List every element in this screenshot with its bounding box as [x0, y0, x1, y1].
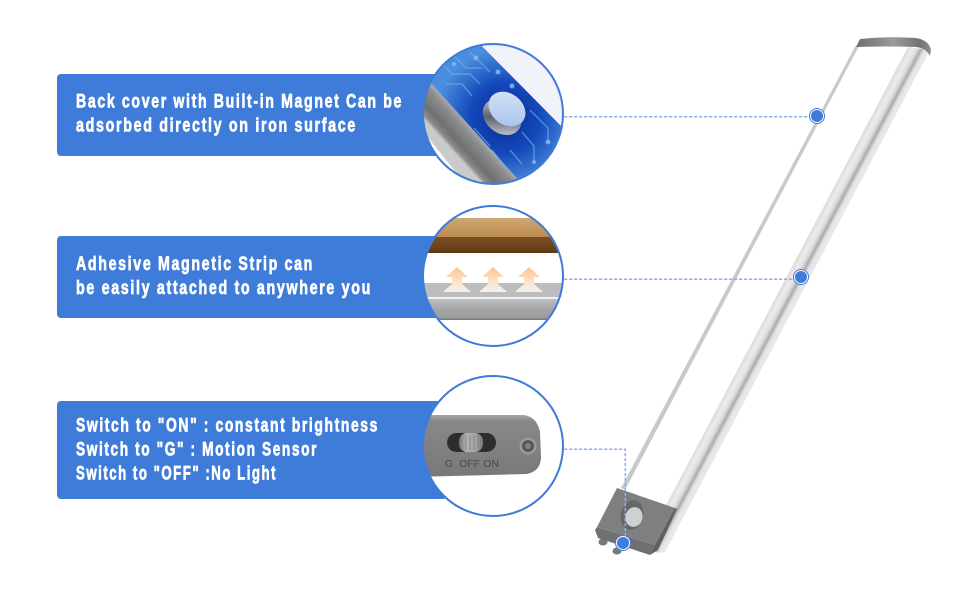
text: magnet description: adsorbed directly on iron surface	[76, 116, 357, 136]
callout circle: magnet close-up	[424, 43, 564, 185]
text: magnet description: Back cover with Built-in Magnet Can be	[76, 92, 403, 112]
connector: switch callout to bar	[564, 449, 630, 550]
top end cap	[856, 37, 931, 56]
panel: magnet back cover	[57, 74, 447, 156]
text: adhesive description: Adhesive Magnetic Strip can	[76, 254, 314, 275]
text: switch modes description: Switch to "ON" : constant brightness	[76, 416, 379, 436]
marker dot	[616, 536, 630, 550]
text: switch modes description	[76, 416, 379, 484]
callout circle: adhesive strip close-up	[420, 206, 566, 346]
text: adhesive description: be easily attached to anywhere you	[76, 278, 372, 299]
text: switch modes description: Switch to "OFF" :No Light	[76, 464, 277, 484]
light bar product	[595, 37, 931, 555]
bottom end cap with sensor	[595, 488, 677, 555]
icon: motion sensor lens	[617, 498, 647, 532]
thin far edge	[621, 46, 859, 490]
silver front rail	[645, 47, 930, 553]
icon: screw	[520, 438, 536, 454]
callout circle: switch close-up	[415, 376, 563, 516]
marker dot	[810, 108, 824, 124]
connector: magnet callout to bar	[564, 108, 824, 124]
marker dot	[794, 270, 808, 284]
text: switch modes description: Switch to "G" : Motion Sensor	[76, 440, 318, 460]
label: switch positions: G OFF ON	[445, 458, 499, 470]
text: adhesive description	[76, 254, 372, 299]
icon: slide switch	[447, 433, 496, 452]
panel: adhesive strip	[57, 236, 447, 318]
panel: switch modes	[57, 401, 447, 499]
icon: round magnet	[476, 84, 532, 143]
icon: heat arrows	[443, 267, 543, 292]
connector: strip callout to bar	[564, 270, 808, 284]
text: magnet description	[76, 92, 403, 136]
feet	[598, 538, 608, 546]
